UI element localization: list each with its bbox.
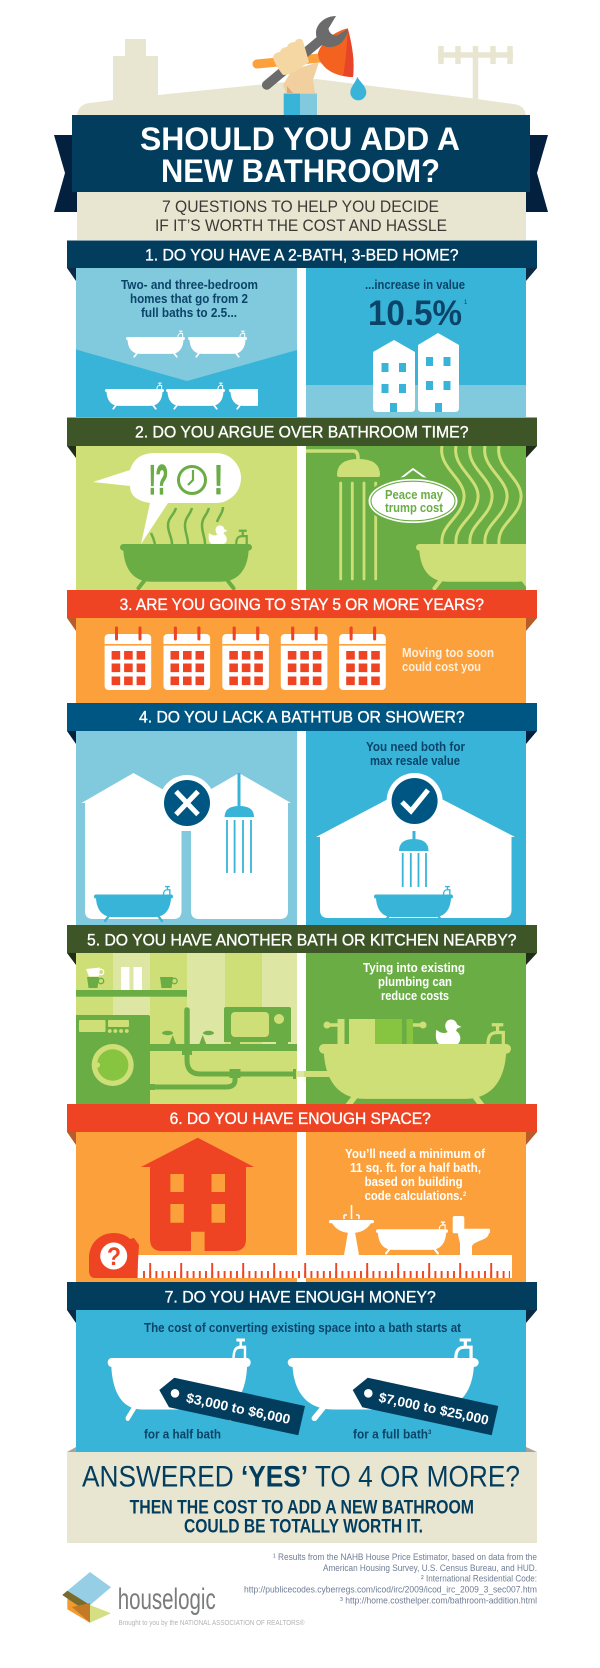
footnotes: ³ http://home.costhelper.com/bathroom-addition.html bbox=[340, 1595, 537, 1606]
heading: question 5 bbox=[67, 925, 537, 953]
icon: check in circle bbox=[387, 773, 443, 829]
text: you need both: You need both for bbox=[366, 740, 465, 754]
text: you need both bbox=[366, 740, 465, 768]
icon: counter and faucet bbox=[150, 1010, 297, 1051]
title text: NEW BATHROOM? bbox=[161, 153, 440, 189]
title text: SHOULD YOU ADD A bbox=[140, 121, 460, 157]
text: tying into existing plumbing bbox=[363, 961, 465, 1003]
icon: pipes bbox=[152, 1050, 296, 1087]
heading: question 1 bbox=[67, 240, 537, 268]
price tag: full bath: $7,000 to $25,000 bbox=[377, 1390, 490, 1428]
panel: question 5 right bbox=[304, 953, 526, 1108]
icon: duck bbox=[436, 1020, 461, 1045]
panel: question 1 right bbox=[306, 268, 526, 417]
icon: washing machine bbox=[76, 1015, 155, 1104]
text: minimum space: You’ll need a minimum of bbox=[345, 1147, 486, 1161]
callout: peace may trump cost: Peace may bbox=[385, 488, 443, 502]
conclusion text: THEN THE COST TO ADD A NEW BATHROOM bbox=[130, 1496, 474, 1518]
icon: five calendars bbox=[105, 628, 386, 690]
price tag: full bath bbox=[353, 1378, 498, 1435]
icon: steam bbox=[151, 507, 223, 544]
footnotes: ² International Residential Code: bbox=[421, 1574, 537, 1585]
panel: question 5 left, kitchen bbox=[76, 953, 297, 1104]
icon: antenna bbox=[438, 46, 513, 100]
pipe into tub bbox=[304, 1071, 335, 1077]
icon: sleeve bbox=[284, 94, 317, 116]
panel: question 2 right bbox=[306, 446, 548, 590]
footnotes bbox=[244, 1552, 537, 1606]
text: two and three bedroom homes bbox=[121, 278, 258, 320]
logo mark bbox=[62, 1572, 111, 1623]
footnotes: American Housing Survey, U.S. Census Bureau, and HUD. bbox=[323, 1563, 537, 1574]
icon: bathtub bbox=[319, 1025, 511, 1108]
icon: toilet bbox=[453, 1216, 490, 1255]
footnotes: ¹ Results from the NAHB House Price Estimator, based on data from the bbox=[273, 1552, 537, 1563]
text: two and three bedroom homes: full baths to 2.5... bbox=[141, 306, 237, 320]
banner 7 tails bbox=[67, 1310, 537, 1323]
price tag: half bath: $3,000 to $6,000 bbox=[185, 1390, 292, 1427]
text: for a full bath: for a full bath bbox=[353, 1428, 428, 1442]
heading: question 2: 2. DO YOU ARGUE OVER BATHROOM TIME? bbox=[135, 422, 468, 441]
icon: tape measure ruler bbox=[138, 1255, 512, 1278]
icon: half bath tub bbox=[108, 1340, 251, 1418]
banner 3 tails bbox=[67, 618, 537, 631]
text: for a half bath: for a half bath bbox=[144, 1428, 221, 1442]
banner 2 tails bbox=[67, 446, 537, 458]
icon: house with tub bbox=[82, 773, 187, 921]
icon: full bath tub bbox=[288, 1340, 479, 1418]
panel: question 1 left bbox=[76, 268, 297, 417]
icon: water drop bbox=[350, 77, 366, 100]
text: you need both: max resale value bbox=[370, 754, 460, 768]
heading: question 1: 1. DO YOU HAVE A 2-BATH, 3-BED HOME? bbox=[145, 246, 458, 264]
icon: duck bbox=[209, 525, 228, 544]
icon: tape measure case with question mark bbox=[89, 1233, 139, 1278]
icon: cream bathtub bbox=[416, 544, 526, 590]
heading: question 6: 6. DO YOU HAVE ENOUGH SPACE? bbox=[170, 1109, 431, 1128]
icon: two full baths bbox=[126, 331, 247, 357]
icon: sink bbox=[329, 1205, 374, 1255]
footnotes: http://publicecodes.cyberregs.com/icod/irc/2009/icod_irc_2009_3_sec007.htm bbox=[244, 1585, 537, 1596]
panel: question 4 left bbox=[76, 731, 297, 925]
logo wordmark: houselogic bbox=[118, 1583, 216, 1616]
text: minimum space: based on building bbox=[365, 1175, 463, 1189]
logo: houselogic bbox=[62, 1572, 305, 1627]
callout: peace may trump cost: trump cost bbox=[385, 501, 444, 515]
icon: towel rack bbox=[324, 1019, 426, 1045]
subtitle panel: IF IT’S WORTH THE COST AND HASSLE bbox=[155, 216, 447, 235]
text: minimum space: 2 bbox=[463, 1192, 467, 1198]
panel: question 2 left bbox=[76, 446, 297, 590]
text: tying into existing plumbing: plumbing can bbox=[378, 975, 452, 989]
icon: X in circle bbox=[159, 775, 215, 831]
panel: question 3 bbox=[76, 618, 526, 703]
heading: question 2 bbox=[67, 418, 537, 446]
icon: speech bubble: !? bbox=[149, 456, 168, 503]
subtitle panel: 7 QUESTIONS TO HELP YOU DECIDE bbox=[162, 197, 439, 216]
heading: question 4 bbox=[67, 703, 537, 731]
banner 6 tails bbox=[67, 1132, 537, 1145]
heading: question 3 bbox=[67, 590, 537, 618]
ribbon tails bbox=[54, 135, 548, 212]
text: minimum space: 11 sq. ft. for a half bath, bbox=[350, 1161, 481, 1175]
heading: question 7: 7. DO YOU HAVE ENOUGH MONEY? bbox=[165, 1287, 436, 1306]
icon: green bathtub bbox=[120, 531, 252, 588]
heading: question 6 bbox=[67, 1104, 537, 1132]
text: for a full bath: 3 bbox=[428, 1430, 432, 1436]
icon: house with shower bbox=[187, 773, 291, 919]
title text bbox=[140, 121, 460, 189]
text: moving too soon: could cost you bbox=[402, 660, 481, 674]
text: moving too soon bbox=[402, 646, 494, 674]
heading: question 5: 5. DO YOU HAVE ANOTHER BATH OR KITCHEN NEARBY? bbox=[87, 931, 516, 950]
heading: question 3: 3. ARE YOU GOING TO STAY 5 OR MORE YEARS? bbox=[120, 595, 484, 614]
panel: question 7 bbox=[76, 1310, 526, 1452]
text: two and three bedroom homes: homes that go from 2 bbox=[130, 292, 248, 306]
conclusion text bbox=[130, 1496, 474, 1538]
icon: house bbox=[141, 1138, 254, 1251]
icon: microwave bbox=[224, 1007, 291, 1045]
banner 5 tails bbox=[67, 953, 537, 965]
panel: question 4 right bbox=[306, 731, 526, 925]
icon: speech bubble bbox=[93, 453, 241, 544]
roof silhouette with chimney bbox=[77, 39, 526, 116]
pipe across gap bbox=[297, 1071, 306, 1077]
text: tying into existing plumbing: Tying into existing bbox=[363, 961, 465, 975]
panel: question 6 right bbox=[306, 1132, 526, 1282]
text: minimum space: code calculations. bbox=[365, 1189, 463, 1203]
icon: tape measure case with question mark: ? bbox=[107, 1243, 121, 1271]
text: two and three bedroom homes: Two- and three-bedroom bbox=[121, 278, 258, 292]
title banner bbox=[72, 115, 530, 192]
icon: steam bbox=[442, 446, 521, 544]
text: moving too soon: Moving too soon bbox=[402, 646, 494, 660]
conclusion panel bbox=[67, 1447, 537, 1543]
footnote mark 1: 1 bbox=[464, 300, 468, 306]
price tag: half bath bbox=[159, 1378, 305, 1435]
heading: question 4: 4. DO YOU LACK A BATHTUB OR SHOWER? bbox=[139, 708, 465, 727]
text: increase in value: ...increase in value bbox=[365, 278, 465, 292]
icon: two and a half baths bbox=[105, 382, 258, 410]
text: cost of converting: The cost of converting existing space into a bath starts at bbox=[144, 1321, 462, 1335]
icon: shower bbox=[306, 451, 380, 579]
banner 1 tails bbox=[67, 268, 537, 281]
conclusion text: COULD BE TOTALLY WORTH IT. bbox=[184, 1516, 423, 1538]
icon: speech bubble: ! bbox=[214, 456, 223, 503]
text: tying into existing plumbing: reduce costs bbox=[381, 989, 449, 1003]
banner 4 tails bbox=[67, 731, 537, 744]
heading: question 7 bbox=[67, 1282, 537, 1310]
icon: house with tub and shower bbox=[316, 785, 515, 921]
subtitle panel bbox=[77, 192, 526, 240]
callout: peace may trump cost bbox=[366, 469, 460, 526]
icon: hand holding wrench and plunger bbox=[257, 16, 354, 116]
icon: shelf with cups bbox=[76, 967, 187, 997]
panel: question 6 left bbox=[76, 1132, 297, 1282]
icon: bathtub bbox=[376, 1222, 448, 1253]
logo tagline: Brought to you by the NATIONAL ASSOCIATION OF REALTORS® bbox=[118, 1619, 305, 1627]
conclusion heading: ANSWERED ‘YES’ TO 4 OR MORE? bbox=[82, 1461, 520, 1494]
icon: two houses bbox=[373, 333, 459, 412]
icon: clock bbox=[178, 466, 206, 494]
stat: 10.5 percent: 10.5% bbox=[368, 294, 462, 333]
text: minimum space bbox=[345, 1147, 486, 1203]
